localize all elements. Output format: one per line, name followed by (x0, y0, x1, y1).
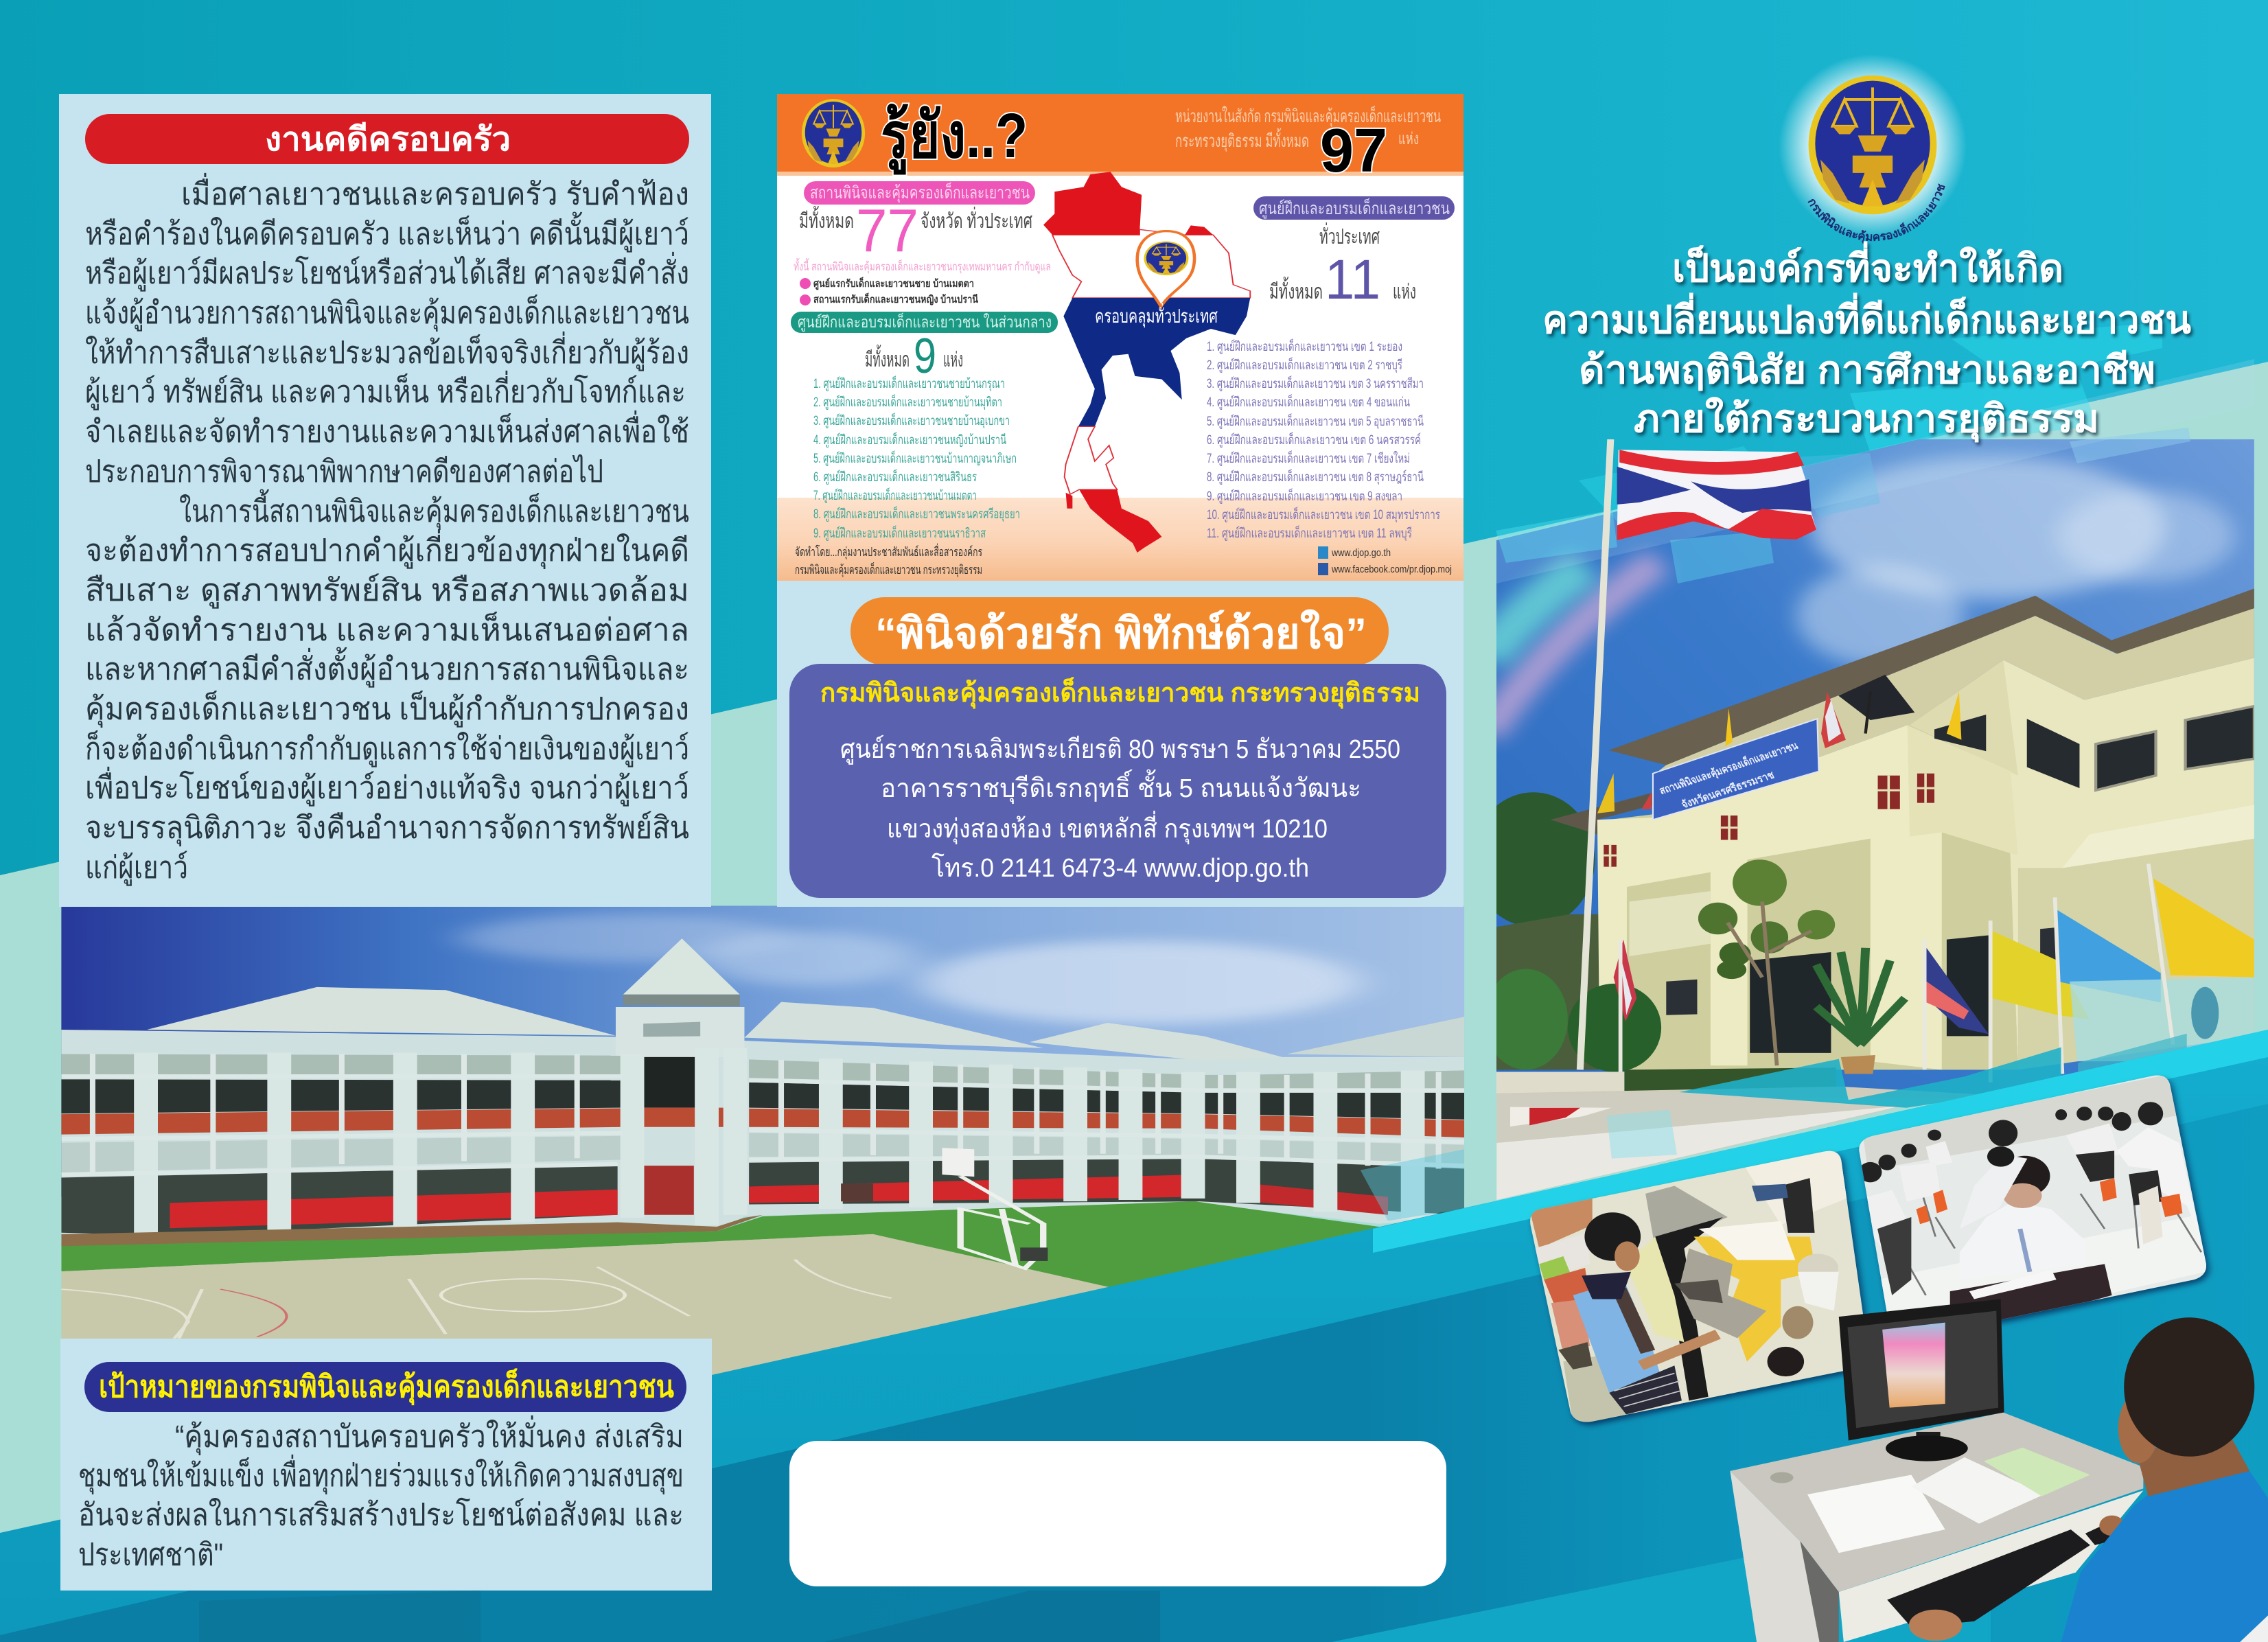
photo: campus building (1496, 439, 2254, 1098)
title (1542, 241, 2191, 443)
body text: family cases: หรือคำร้องในคดีครอบครัว และเห็นว่า คดีนั้นมีผู้เยาว์ (85, 211, 689, 253)
body text: family cases: ให้ทำการสืบเสาะและประมวลข้อเท็จจริงเกี่ยวกับผู้ร้อง (85, 331, 689, 371)
regional training centres: 11 (1325, 248, 1380, 311)
central training centres: 5. ศูนย์ฝึกและอบรมเด็กและเยาวชนบ้านกาญจนาภิเษก (813, 450, 1017, 466)
body text: goal: อันจะส่งผลในการเสริมสร้างประโยชน์ต่อสังคม และ (78, 1497, 684, 1532)
body text: family cases: แล้วจัดทำรายงาน และความเห็นเสนอต่อศาล (85, 612, 689, 647)
regional training centres: 4. ศูนย์ฝึกและอบรมเด็กและเยาวชน เขต 4 ขอนแก่น (1207, 393, 1410, 410)
background: mint diagonal band (0, 362, 2268, 1642)
poster header: กระทรวงยุติธรรม มีทั้งหมด (1175, 128, 1309, 152)
panel: contact (777, 581, 1463, 907)
regional training centres: 7. ศูนย์ฝึกและอบรมเด็กและเยาวชน เขต 7 เชียงใหม่ (1207, 450, 1410, 466)
body text: family cases: และหากศาลมีคำสั่งตั้งผู้อำนวยการสถานพินิจและ (85, 647, 689, 688)
regional training centres: 1. ศูนย์ฝึกและอบรมเด็กและเยาวชน เขต 1 ระยอง (1207, 338, 1402, 354)
central training centres: ศูนย์ฝึกและอบรมเด็กและเยาวชน ในส่วนกลาง (798, 312, 1052, 332)
regional training centres: ทั่วประเทศ (1319, 222, 1380, 248)
central training centres: 2. ศูนย์ฝึกและอบรมเด็กและเยาวชนชายบ้านมุทิตา (813, 393, 1002, 410)
regional training centres: แห่ง (1393, 281, 1416, 303)
body text: family cases: ก็จะต้องดำเนินการกำกับดูแลการใช้จ่ายเงินของผู้เยาว์ (85, 730, 689, 767)
poster header: หน่วยงานในสังกัด กรมพินิจและคุ้มครองเด็กและเยาวชน (1175, 105, 1441, 127)
central training centres: 9 (914, 329, 936, 384)
title: ความเปลี่ยนแปลงที่ดีแก่เด็กและเยาวชน (1542, 292, 2191, 341)
central training centres: 9. ศูนย์ฝึกและอบรมเด็กและเยาวชนนราธิวาส (813, 524, 986, 541)
body text: family cases: ผู้เยาว์ ทรัพย์สิน และความเห็น หรือเกี่ยวกับโจทก์และ (85, 370, 686, 410)
heading pill: family cases: งานคดีครอบครัว (265, 122, 511, 158)
juvenile observation stat: มีทั้งหมด (799, 206, 854, 233)
computer workstation (1730, 1299, 2143, 1642)
regional training centres: 2. ศูนย์ฝึกและอบรมเด็กและเยาวชน เขต 2 ราชบุรี (1207, 356, 1402, 373)
poster header: แห่ง (1398, 130, 1419, 148)
juvenile observation stat: สถานพินิจและคุ้มครองเด็กและเยาวชน (810, 182, 1030, 203)
map caption: ครอบคลุมทั่วประเทศ (1095, 303, 1218, 328)
panel: family cases (59, 94, 711, 907)
address box: ศูนย์ราชการเฉลิมพระเกียรติ 80 พรรษา 5 ธันวาคม 2550 (840, 735, 1400, 765)
title: ด้านพฤตินิสัย การศึกษาและอาชีพ (1579, 348, 2155, 391)
juvenile observation stat: 77 (856, 196, 918, 264)
central training centres: 6. ศูนย์ฝึกและอบรมเด็กและเยาวชนสิรินธร (813, 468, 977, 485)
central training centres: 7. ศูนย์ฝึกและอบรมเด็กและเยาวชนบ้านเมตตา (813, 487, 977, 503)
slogan pill (850, 597, 1389, 665)
poster web links: www.djop.go.th (1331, 547, 1391, 559)
heading pill: goal: เป้าหมายของกรมพินิจและคุ้มครองเด็กและเยาวชน (99, 1368, 674, 1406)
body text: family cases: เมื่อศาลเยาวชนและครอบครัว รับคำฟ้อง (181, 172, 689, 211)
body text: family cases: จะต้องทำการสอบปากคำผู้เกี่ยวข้องทุกฝ่ายในคดี (85, 529, 689, 569)
central training centres: 8. ศูนย์ฝึกและอบรมเด็กและเยาวชนพระนครศรีอยุธยา (813, 505, 1020, 522)
photo group: training activities (1528, 1075, 2268, 1642)
juvenile observation stat: จังหวัด ทั่วประเทศ (921, 207, 1032, 233)
flag and pole (1576, 439, 1816, 1069)
central training centres: 4. ศูนย์ฝึกและอบรมเด็กและเยาวชนหญิงบ้านปรานี (813, 431, 1006, 448)
body text: family cases: ในการนี้สถานพินิจและคุ้มครองเด็กและเยาวชน (179, 489, 689, 530)
panel: goal (60, 1339, 712, 1591)
body text: family cases: คุ้มครองเด็กและเยาวชน เป็นผู้กำกับการปกครอง (85, 691, 689, 728)
address box: อาคารราชบุรีดิเรกฤทธิ์ ชั้น 5 ถนนแจ้งวัฒนะ (881, 769, 1361, 804)
address box: แขวงทุ่งสองห้อง เขตหลักสี่ กรุงเทพฯ 10210 (887, 811, 1328, 844)
photo: campus building: สถานพินิจและคุ้มครองเด็กและเยาวชน (1656, 738, 1801, 798)
photo: school courtyard building (61, 906, 1465, 1375)
body text: family cases (85, 172, 689, 886)
regional training centres: มีทั้งหมด (1269, 277, 1323, 303)
regional training centres: 11. ศูนย์ฝึกและอบรมเด็กและเยาวชน เขต 11 ลพบุรี (1207, 524, 1412, 542)
body text: family cases: จำเลยและจัดทำรายงานและความเห็นส่งศาลเพื่อใช้ (85, 410, 689, 449)
central training centres: แห่ง (943, 349, 963, 371)
body text: family cases: แก่ผู้เยาว์ (85, 850, 188, 886)
poster web links: www.facebook.com/pr.djop.moj (1331, 564, 1452, 575)
student at computer (2061, 1317, 2268, 1642)
body text: family cases: หรือผู้เยาว์มีผลประโยชน์หรือส่วนได้เสีย ศาลจะมีคำสั่ง (85, 251, 689, 292)
juvenile observation stat: ทั้งนี้ สถานพินิจและคุ้มครองเด็กและเยาวชนกรุงเทพมหานคร กำกับดูแล (794, 258, 1051, 274)
foreground: road, curb and translucent overlays (1496, 1034, 2187, 1200)
poster credit (795, 543, 982, 577)
translucent cyan blocks over sky (1496, 359, 2254, 583)
background: dark block A (199, 1591, 481, 1642)
regional training centres: 5. ศูนย์ฝึกและอบรมเด็กและเยาวชน เขต 5 อุบลราชธานี (1207, 413, 1424, 430)
photo: students in examination (1858, 1075, 2214, 1327)
body text: goal: ประเทศชาติ" (78, 1537, 223, 1572)
poster credit: กรมพินิจและคุ้มครองเด็กและเยาวชน กระทรวงยุติธรรม (795, 562, 982, 577)
body text: goal: ชุมชนให้เข้มแข็ง เพื่อทุกฝ่ายร่วมแรงให้เกิดความสงบสุข (78, 1454, 684, 1494)
poster credit: จัดทำโดย...กลุ่มงานประชาสัมพันธ์และสื่อสารองค์กร (795, 543, 982, 559)
juvenile observation stat: สถานแรกรับเด็กและเยาวชนหญิง บ้านปรานี (813, 292, 979, 305)
regional training centres: 8. ศูนย์ฝึกและอบรมเด็กและเยาวชน เขต 8 สุราษฎร์ธานี (1207, 468, 1424, 485)
background: dark block B (824, 1591, 1160, 1642)
poster header: รู้ยัง..? (881, 101, 1028, 175)
body text: goal (78, 1415, 684, 1572)
icon: department seal with glow (1780, 56, 1965, 244)
photo: campus building: จังหวัดนครศรีธรรมราช (1679, 769, 1776, 811)
title: ภายใต้กระบวนการยุติธรรม (1634, 396, 2099, 443)
background: lower right teal wedge (1332, 1510, 1991, 1642)
white address label box (789, 1441, 1446, 1586)
body text: goal: “คุ้มครองสถาบันครอบครัวให้มั่นคง ส่งเสริม (175, 1415, 684, 1455)
photo: barista training (1528, 1150, 1870, 1429)
background: translucent cyan blocks above sky (1850, 323, 2162, 453)
background: bright cyan diagonal stripe (1373, 1030, 2268, 1253)
title: เป็นองค์กรที่จะทำให้เกิด (1672, 241, 2063, 290)
central training centres: 1. ศูนย์ฝึกและอบรมเด็กและเยาวชนชายบ้านกรุณา (813, 375, 1005, 392)
map of Thailand (1043, 172, 1251, 553)
address box (789, 664, 1446, 898)
regional training centres: 10. ศูนย์ฝึกและอบรมเด็กและเยาวชน เขต 10 สมุทรปราการ (1207, 506, 1440, 523)
juvenile observation stat (794, 181, 1051, 305)
heading pill: goal (84, 1362, 686, 1412)
regional training centres: 3. ศูนย์ฝึกและอบรมเด็กและเยาวชน เขต 3 นครราชสีมา (1207, 375, 1424, 391)
poster web links (1318, 546, 1452, 575)
body text: family cases: สืบเสาะ ดูสภาพทรัพย์สิน หรือสภาพแวดล้อม (85, 573, 689, 609)
body text: family cases: ประกอบการพิจารณาพิพากษาคดีของศาลต่อไป (85, 454, 603, 489)
panel: did you know poster (777, 94, 1463, 581)
slogan pill: “พินิจด้วยรัก พิทักษ์ด้วยใจ” (875, 609, 1367, 658)
regional training centres: ศูนย์ฝึกและอบรมเด็กและเยาวชน (1259, 198, 1450, 219)
central training centres: มีทั้งหมด (865, 345, 910, 371)
juvenile observation stat: ศูนย์แรกรับเด็กและเยาวชนชาย บ้านเมตตา (813, 277, 974, 290)
body text: family cases: จะบรรลุนิติภาวะ จึงคืนอำนาจการจัดการทรัพย์สิน (85, 810, 689, 846)
address box: กรมพินิจและคุ้มครองเด็กและเยาวชน กระทรวงยุติธรรม (820, 677, 1420, 709)
body text: family cases: แจ้งผู้อำนวยการสถานพินิจและคุ้มครองเด็กและเยาวชน (85, 294, 689, 332)
regional training centres: 9. ศูนย์ฝึกและอบรมเด็กและเยาวชน เขต 9 สงขลา (1207, 487, 1402, 504)
poster header: 97 (1320, 117, 1387, 185)
background: lower blue diagonal (0, 1030, 2268, 1642)
body text: family cases: เพื่อประโยชน์ของผู้เยาว์อย่างแท้จริง จนกว่าผู้เยาว์ (85, 766, 689, 807)
background: darker diagonal layer (0, 1104, 2268, 1642)
address box: โทร.0 2141 6473-4 www.djop.go.th (931, 853, 1309, 883)
regional training centres: 6. ศูนย์ฝึกและอบรมเด็กและเยาวชน เขต 6 นครสวรรค์ (1207, 431, 1421, 448)
poster seal (802, 99, 865, 167)
regional training centres (1207, 196, 1455, 542)
central training centres (791, 312, 1058, 541)
central training centres: 3. ศูนย์ฝึกและอบรมเด็กและเยาวชนชายบ้านอุเบกขา (813, 412, 1010, 429)
heading pill: family cases (85, 114, 689, 164)
poster header (777, 94, 1463, 185)
